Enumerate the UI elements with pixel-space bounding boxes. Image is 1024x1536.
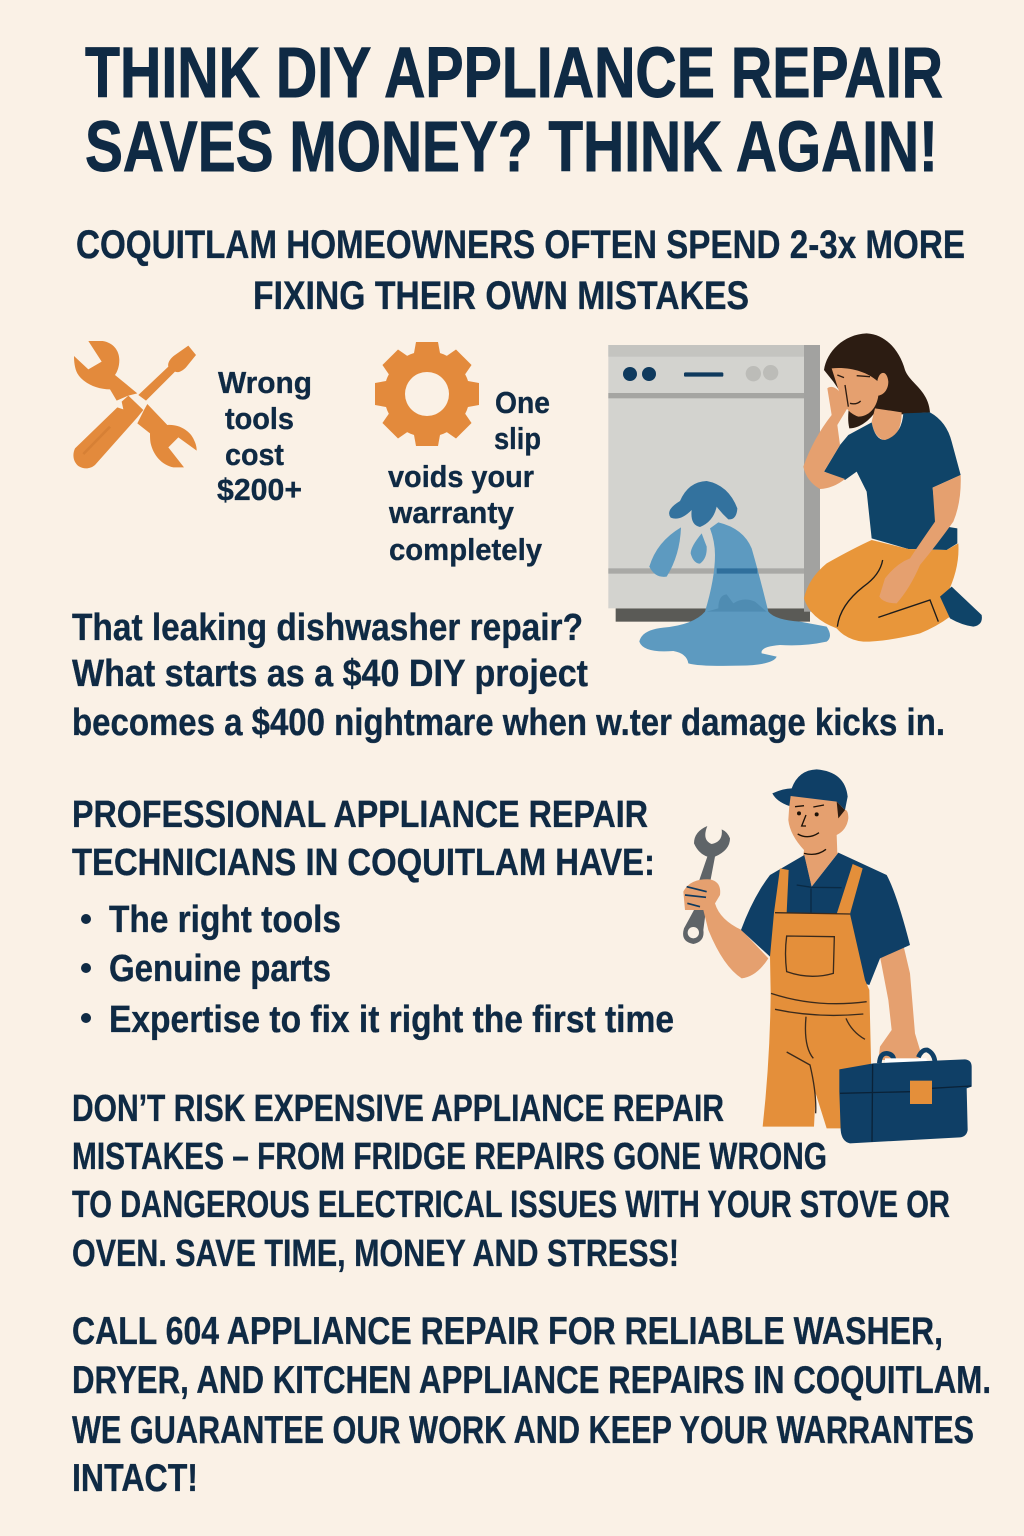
- paragraph: don't risk mistakes: [72, 1088, 950, 1275]
- text: one slip voids warranty: completely: [389, 532, 543, 567]
- paragraph: don't risk mistakes: MISTAKES – FROM FRIDGE REPAIRS GONE WRONG: [72, 1136, 827, 1178]
- text: wrong tools cost: Wrong: [218, 365, 312, 400]
- text: one slip voids warranty: One: [495, 385, 550, 420]
- heading: professional technicians: [72, 794, 655, 884]
- paragraph: don't risk mistakes: DON’T RISK EXPENSIVE APPLIANCE REPAIR: [72, 1088, 724, 1130]
- icon: gear: [375, 342, 479, 446]
- subtitle: [76, 223, 965, 318]
- subtitle: FIXING THEIR OWN MISTAKES: [253, 274, 749, 318]
- paragraph: leaking dishwasher: That leaking dishwasher repair?: [72, 607, 583, 649]
- heading: professional technicians: PROFESSIONAL APPLIANCE REPAIR: [72, 794, 648, 836]
- arms: [683, 879, 768, 978]
- text: wrong tools cost: cost: [225, 437, 284, 472]
- paragraph: leaking dishwasher: What starts as a $40 DIY project: [72, 653, 588, 695]
- text: one slip voids warranty: [388, 385, 550, 567]
- wrench: [683, 826, 730, 944]
- toolbox: [879, 1050, 935, 1063]
- text: wrong tools cost: [217, 365, 312, 507]
- title: [85, 34, 943, 187]
- face: [797, 811, 801, 815]
- text: one slip voids warranty: voids your: [388, 459, 534, 494]
- bullet list: [81, 899, 674, 1041]
- cap: [772, 769, 848, 810]
- text: one slip voids warranty: slip: [494, 421, 541, 456]
- woman: [803, 333, 982, 642]
- paragraph: don't risk mistakes: OVEN. SAVE TIME, MONEY AND STRESS!: [72, 1233, 679, 1275]
- call to action: [72, 1310, 991, 1500]
- icon: crossed wrench and screwdriver: [73, 341, 197, 468]
- dishwasher: [608, 345, 820, 622]
- text: wrong tools cost: $200+: [217, 472, 302, 507]
- text: one slip voids warranty: warranty: [388, 495, 515, 530]
- illustration: leaking dishwasher and upset woman: [608, 333, 982, 666]
- illustration: technician with wrench and toolbox: [683, 769, 972, 1143]
- shirt: [741, 853, 910, 985]
- overalls: [763, 864, 873, 1128]
- paragraph: leaking dishwasher: [72, 607, 945, 744]
- bullet list: Expertise to fix it right the first time: [109, 999, 674, 1041]
- water leak: [639, 481, 830, 666]
- call to action: INTACT!: [72, 1457, 198, 1500]
- head and neck: [788, 795, 848, 887]
- text: wrong tools cost: tools: [225, 401, 294, 436]
- bullet list: The right tools: [109, 899, 341, 941]
- bullet list: Genuine parts: [109, 948, 331, 990]
- heading: professional technicians: TECHNICIANS IN COQUITLAM HAVE:: [72, 842, 655, 884]
